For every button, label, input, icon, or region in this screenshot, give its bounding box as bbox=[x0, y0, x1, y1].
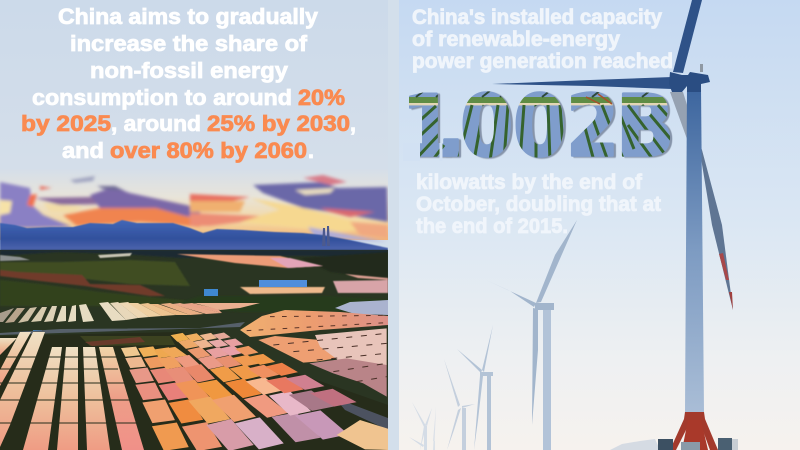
turbine two bbox=[486, 220, 577, 450]
text block: non-fossil energy targets: consumption to around bbox=[32, 85, 292, 110]
text block: kilowatts by end of October: the end of 2015. bbox=[416, 215, 568, 238]
text block: kilowatts by end of October bbox=[416, 171, 661, 238]
panel: offshore wind turbines bbox=[399, 0, 800, 450]
text block: non-fossil energy targets: non-fossil energy bbox=[90, 58, 289, 83]
foreground pond bbox=[337, 420, 390, 450]
panel: solar farm at sunset bbox=[0, 172, 388, 450]
text block: installed capacity intro: China's installed capacity bbox=[412, 6, 662, 29]
text block: kilowatts by end of October: October, doubling that at bbox=[416, 193, 661, 216]
text block: installed capacity intro: of renewable-energy bbox=[412, 28, 620, 51]
sunset clouds bbox=[0, 175, 388, 242]
main turbine blades upper bbox=[492, 0, 702, 89]
sky bbox=[399, 0, 800, 450]
small turbines bbox=[409, 402, 436, 450]
text block: installed capacity intro: power generation reached bbox=[412, 50, 673, 73]
pylon bbox=[322, 226, 330, 246]
far solar arrays bbox=[0, 253, 388, 294]
text block: non-fossil energy targets: 25% by 2030 bbox=[207, 111, 350, 136]
land base bbox=[0, 250, 388, 405]
blue buildings bbox=[33, 280, 307, 335]
distant mountain bbox=[610, 439, 660, 450]
text block: non-fossil energy targets: and bbox=[62, 138, 104, 163]
text block: installed capacity intro bbox=[412, 6, 673, 73]
text block: non-fossil energy targets: over 80% by 2060 bbox=[110, 138, 307, 163]
central solar panels bbox=[121, 310, 390, 450]
pathway bbox=[0, 322, 245, 335]
text block: non-fossil energy targets: . bbox=[308, 138, 314, 163]
pond bbox=[335, 300, 388, 315]
far-left solar rows bbox=[0, 332, 144, 450]
text block: non-fossil energy targets: 20% bbox=[298, 85, 345, 110]
turbine three bbox=[457, 325, 493, 450]
text block: non-fossil energy targets bbox=[21, 4, 356, 163]
text block: kilowatts by end of October: kilowatts by the end of bbox=[416, 171, 643, 194]
text block: non-fossil energy targets: , bbox=[350, 111, 356, 136]
ground under arrays bbox=[0, 332, 388, 450]
text block: non-fossil energy targets: increase the share of bbox=[70, 31, 308, 56]
big number: 1.002B: 1.002B bbox=[402, 78, 674, 177]
right solar block lower bbox=[247, 315, 387, 397]
forest and fields bbox=[0, 250, 388, 312]
text block: non-fossil energy targets: by 2025 bbox=[21, 111, 111, 136]
nacelle bbox=[669, 64, 710, 92]
turbine base bbox=[658, 412, 738, 450]
road beside arrays bbox=[341, 404, 388, 429]
turbine four bbox=[444, 359, 475, 450]
text block: non-fossil energy targets: , around bbox=[111, 111, 201, 136]
text block: non-fossil energy targets: China aims to gradually bbox=[58, 4, 319, 29]
sky bbox=[0, 178, 388, 240]
main turbine blade lower bbox=[670, 92, 733, 310]
mountains bbox=[0, 220, 388, 254]
middle solar row band bbox=[0, 302, 260, 323]
main turbine tower bbox=[685, 88, 704, 412]
right solar block upper bbox=[240, 310, 388, 337]
